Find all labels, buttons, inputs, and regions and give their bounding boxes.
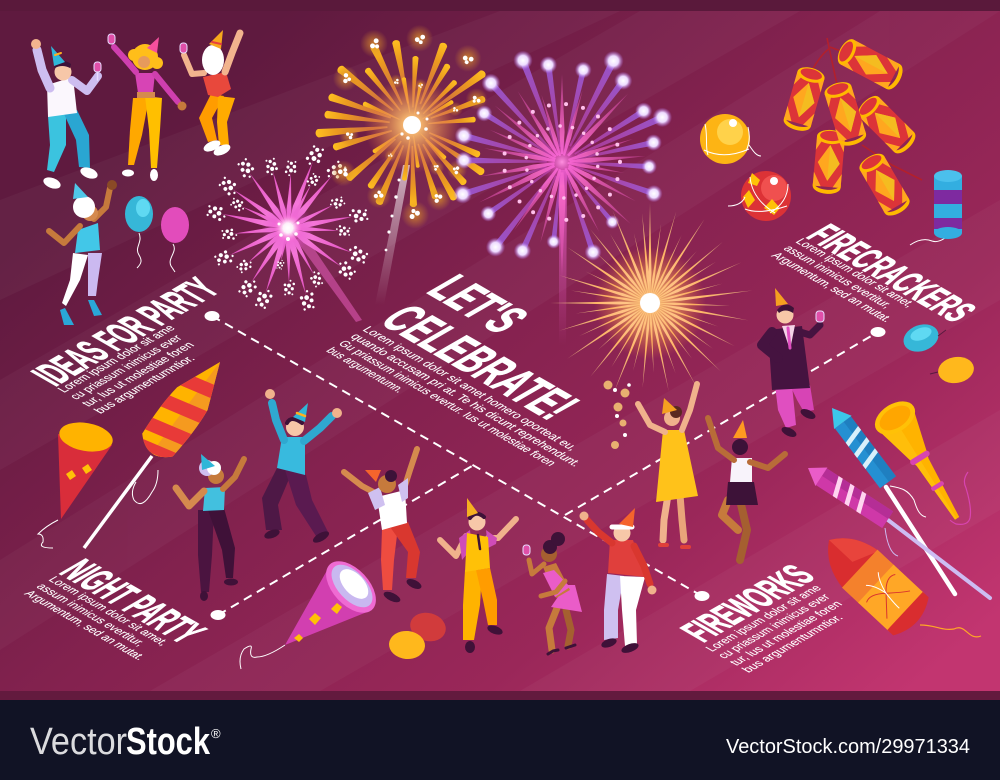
person: woman in dark skirt [708, 418, 785, 560]
firecracker: right [854, 92, 919, 157]
firework: purple burst [451, 47, 675, 345]
text block: Night party: Argumentum, sed an mutat. [21, 588, 148, 662]
balloon: pink [161, 207, 189, 272]
ball: red with stars [728, 171, 791, 221]
title: Let's Celebrate [368, 267, 593, 427]
person: woman in blue top and white trousers [49, 180, 117, 325]
person: man with white shirt and red trousers [344, 449, 423, 604]
blue rocket [823, 401, 955, 594]
watermark logo: Stock [126, 721, 211, 763]
watermark logo: ® [211, 726, 221, 741]
balloon: yellow bottom [388, 629, 426, 661]
text block: Firecrackers: assum inimicus evertitur, [780, 243, 895, 310]
heading: Fireworks: FIREWORKS [671, 559, 824, 648]
text block: Let's Celebrate: quando accusam pri at. Te his dicunt reprehendunt. [347, 331, 585, 469]
person: man in white shirt and blue trousers [31, 39, 101, 191]
firecracker: upper left [782, 64, 826, 134]
person: woman in pink skirt [523, 532, 582, 654]
person: man with blue shirt [262, 389, 342, 545]
person: man in yellow [440, 498, 516, 653]
party cone: pink [240, 552, 385, 669]
person: man in dark suit and pink trousers [762, 288, 824, 439]
watermark logo [30, 721, 221, 763]
text block: Firecrackers: Lorem ipsum dolor sit amet, [792, 236, 918, 309]
connector dots [204, 311, 886, 620]
firecracker: centre [823, 79, 868, 149]
text block: Ideas for party: Lorem ipsum dolor sit ame [54, 323, 178, 395]
ball: yellow [700, 114, 761, 164]
watermark logo: Vector [30, 721, 127, 763]
firework: gold burst [315, 24, 491, 305]
watermark url: VectorStock.com/29971334 [726, 736, 970, 758]
text block: Night party: Lorem ipsum dolor sit amet, [45, 574, 172, 648]
text block: Let's Celebrate: bus argumentumn. [323, 345, 408, 395]
firecracker: lower left [812, 129, 846, 195]
big striped rocket [82, 362, 220, 549]
dashed connector lines [212, 316, 878, 615]
person: woman in yellow dress [638, 384, 698, 547]
text block: Fireworks: cu priassum inimicus ever [715, 592, 833, 661]
text block: Ideas for party: cu priassum inimicus ever [67, 333, 185, 402]
person: woman in red top and orange trousers [180, 30, 240, 158]
party cone: red [38, 419, 115, 548]
balloon: yellow right [930, 354, 976, 386]
firecracker: blue striped [910, 170, 962, 245]
text block: Firecrackers: Argumentum, sed an mutat. [768, 250, 895, 324]
person: woman with blue top and dark trousers [176, 454, 244, 601]
pink rocket [802, 459, 990, 598]
person: woman in pink top and yellow trousers [108, 34, 186, 181]
balloon: red bottom [407, 609, 449, 645]
text block: Let's Celebrate: Lorem ipsum dolor sit amet homero oporteat eu, [359, 324, 581, 453]
firecracker: lower right [856, 150, 913, 219]
text block: Night party: assum inimicus evertitur, [33, 581, 148, 648]
big orange firework rocket [811, 521, 981, 641]
balloon: blue right [900, 320, 946, 356]
text block: Ideas for party: bus argumentumntior. [91, 353, 198, 416]
firecrackers [782, 36, 922, 219]
balloon: blue [125, 196, 153, 268]
heading: Ideas for party: IDEAS FOR PARTY [22, 272, 230, 392]
heading: Night party: NIGHT PARTY [49, 553, 216, 650]
firework: orange burst [550, 203, 752, 449]
title: Let's Celebrate: LET'S [415, 267, 542, 341]
watermark bar [0, 700, 1000, 780]
firework: pink and white burst [206, 144, 369, 322]
text block: Fireworks: tur, lus ut molestiae foren [727, 599, 845, 668]
party horn [869, 394, 976, 530]
text block: Fireworks: bus argumentumntior. [739, 612, 846, 675]
title: Let's Celebrate: CELEBRATE! [368, 297, 593, 427]
text block: Let's Celebrate: Gu priassum inimicus evertur. Ius ut molestiae foren [335, 338, 559, 468]
person: man in red shirt and white trousers [580, 508, 656, 655]
text block: Ideas for party: tur, lus ut molestiae foren [79, 340, 197, 409]
firecracker: top [834, 36, 906, 92]
text block: Fireworks: Lorem ipsum dolor sit ame [702, 583, 825, 654]
